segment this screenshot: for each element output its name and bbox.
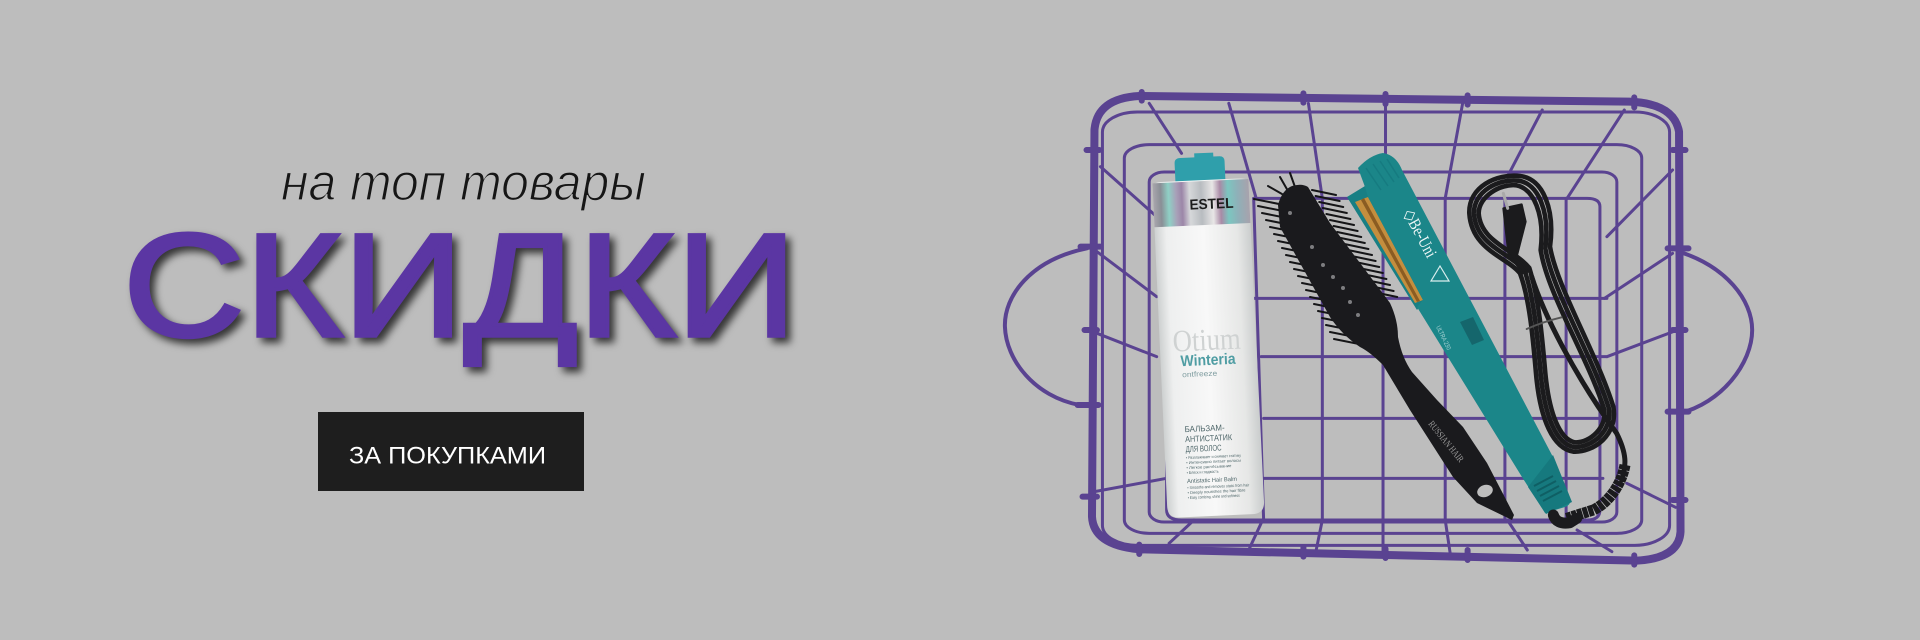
brush logo: RUSSIAN HAIR — [1426, 420, 1465, 465]
straightener brand: ◇Be-Uni — [1399, 206, 1441, 261]
bottle product name: Winteria — [1180, 351, 1236, 370]
hair straightener — [1347, 153, 1572, 514]
bottle subline: ontfreeze — [1182, 369, 1217, 379]
cord loops — [1469, 176, 1625, 480]
bottle description: • Интенсивно питает волосы — [1186, 458, 1241, 465]
bottle description: • Легкое расчёсывание — [1186, 463, 1232, 470]
cord strain relief — [1567, 465, 1625, 518]
basket — [1005, 92, 1752, 565]
bottle description: • Deeply nourishes the hair fibre — [1187, 487, 1246, 495]
bottle description: • Разглаживает и снимает статику — [1186, 453, 1241, 460]
bottle description: БАЛЬЗАМ- — [1184, 422, 1225, 434]
bottle description: ДЛЯ ВОЛОС — [1185, 442, 1222, 454]
cord plug — [1503, 204, 1528, 273]
straightener badge — [1431, 266, 1449, 281]
bottle brand: ESTEL — [1189, 196, 1234, 214]
straightener model: ULTRA 230 — [1434, 325, 1452, 352]
power cord — [1469, 176, 1625, 523]
bottle description: АНТИСТАТИК — [1185, 432, 1232, 444]
button — [318, 412, 584, 491]
brush vents — [1288, 211, 1360, 317]
straightener body — [1358, 153, 1570, 513]
basket wire grid — [1094, 103, 1678, 553]
bottle description: • Smooths and removes static from hair — [1187, 482, 1250, 490]
cord tie — [1527, 317, 1562, 329]
button label: ЗА ПОКУПКАМИ — [349, 442, 546, 470]
subtitle: на топ товары — [281, 154, 646, 212]
bottle description — [1184, 421, 1250, 500]
bottle description: Antistatic Hair Balm — [1187, 477, 1237, 485]
basket knots — [1078, 92, 1688, 565]
bottle holographic band — [1152, 179, 1250, 227]
straightener gold plate — [1355, 197, 1423, 303]
brush bristles — [1254, 173, 1397, 345]
bottle description: • Блеск и гладкость — [1187, 469, 1219, 475]
bottle description: • Easy combing, shine and softness — [1188, 493, 1240, 500]
straightener collar — [1528, 455, 1572, 514]
basket rim — [1092, 96, 1681, 561]
bottle — [1151, 151, 1265, 518]
straightener lower plate — [1347, 186, 1428, 310]
straightener display — [1460, 317, 1484, 345]
bottle cap — [1174, 152, 1225, 183]
plug prongs — [1503, 193, 1508, 208]
brush hole — [1475, 483, 1495, 499]
bottle body — [1152, 178, 1265, 518]
bottle line name: Otium — [1172, 321, 1241, 359]
basket handles — [1005, 248, 1752, 413]
heading: СКИДКИ — [123, 204, 797, 368]
straightener ridges — [1366, 159, 1399, 190]
brush body — [1278, 185, 1514, 520]
cord elbow — [1553, 515, 1577, 523]
brush — [1254, 173, 1514, 520]
